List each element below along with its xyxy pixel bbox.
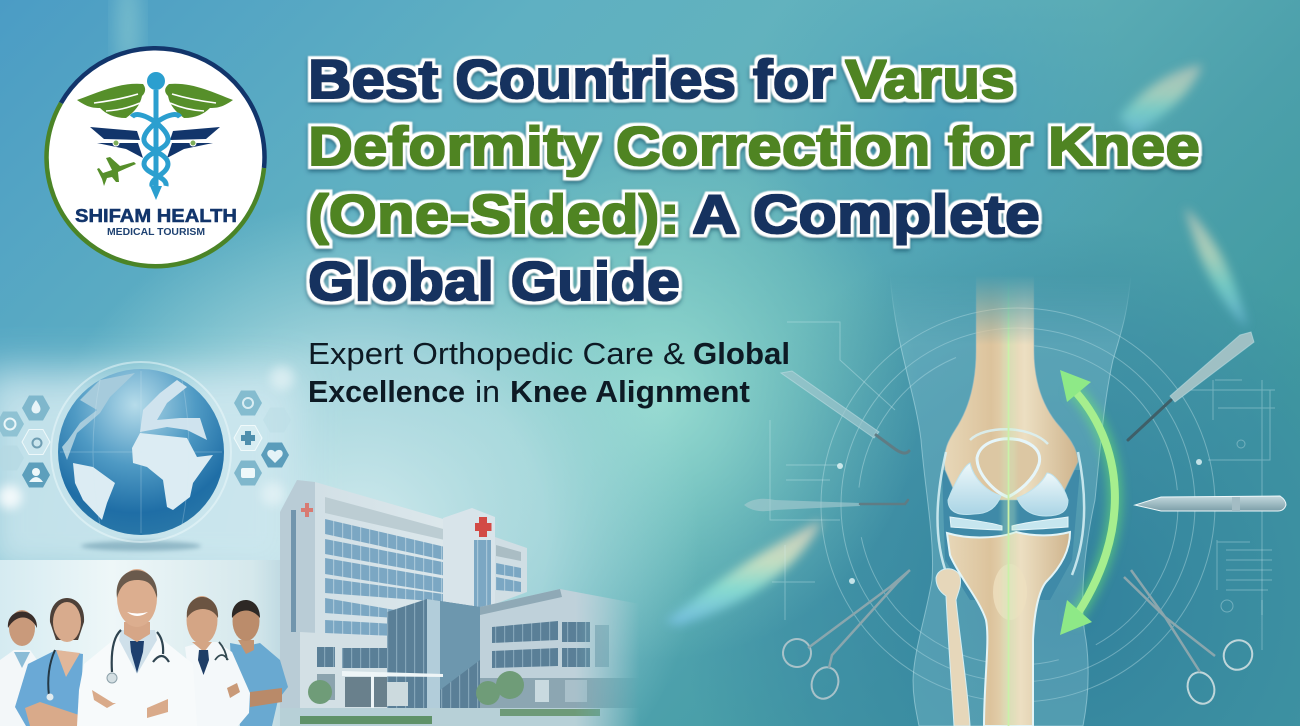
icon: green wings bbox=[77, 84, 233, 118]
capsule outline bbox=[938, 429, 1084, 575]
hospital building bbox=[280, 480, 650, 726]
continents bbox=[62, 373, 213, 520]
entrance canopy bbox=[342, 671, 443, 677]
title: A Complete bbox=[692, 183, 1040, 245]
title: Best Countries for bbox=[308, 48, 833, 110]
subtitle: Excellence bbox=[308, 374, 465, 409]
badge circle bbox=[46, 48, 265, 266]
title: (One-Sided): bbox=[308, 183, 680, 245]
light streaks bbox=[118, 0, 1247, 625]
knee anatomy bbox=[890, 275, 1131, 726]
roof glazing bbox=[325, 497, 443, 540]
instrument: dissector top right bbox=[1128, 332, 1254, 440]
podium bbox=[300, 632, 315, 708]
glow blobs bbox=[0, 366, 294, 509]
logo wordmark: SHIFAM HEALTH bbox=[75, 206, 237, 226]
subtitle: Expert Orthopedic Care & bbox=[308, 336, 685, 371]
logo badge bbox=[46, 48, 265, 266]
subtitle bbox=[308, 336, 790, 409]
dark joint backdrop bbox=[942, 470, 1080, 600]
logo tagline: MEDICAL TOURISM bbox=[107, 227, 205, 238]
title bbox=[308, 48, 1200, 312]
femur bbox=[944, 275, 1078, 500]
right wing bbox=[495, 537, 527, 604]
soft tissue silhouette bbox=[890, 275, 1131, 726]
doctor right in white coat bbox=[185, 596, 250, 726]
hedge and forecourt bbox=[280, 708, 650, 726]
tower bbox=[443, 508, 495, 610]
globe cluster bbox=[0, 362, 294, 551]
icon: navy lower wings bbox=[90, 127, 220, 158]
backdrop panel bbox=[0, 560, 280, 726]
meniscus bbox=[950, 517, 1068, 530]
hexagon icons right bbox=[234, 390, 291, 486]
correction arrow bbox=[1060, 370, 1115, 635]
tibia bbox=[947, 532, 1070, 726]
instrument: scalpel right bbox=[1135, 496, 1286, 511]
subtitle: Global bbox=[693, 336, 790, 371]
technical ring diagram behind knee bbox=[770, 308, 1275, 702]
main front facade bbox=[315, 482, 443, 637]
tibial tuberosity bbox=[993, 565, 1007, 619]
axis glow bbox=[1002, 275, 1016, 726]
surgical instruments bbox=[744, 332, 1286, 707]
lateral cartilage bbox=[1017, 473, 1068, 516]
icon: red cross bbox=[475, 517, 492, 537]
globe shadow bbox=[81, 541, 201, 551]
doctors group bbox=[0, 560, 288, 726]
instrument: probe left bbox=[744, 499, 908, 511]
doctor female in blue scrubs bbox=[15, 598, 84, 726]
window bands bbox=[325, 519, 443, 636]
patella bbox=[977, 439, 1040, 497]
left side face bbox=[280, 480, 315, 708]
fibula bbox=[936, 569, 970, 726]
instrument: forceps left bbox=[778, 570, 910, 702]
small red cross bbox=[301, 503, 313, 517]
subtitle: in bbox=[475, 374, 500, 409]
instrument: scissors right bbox=[1124, 570, 1258, 707]
title: Varus bbox=[845, 48, 1015, 110]
icon: caduceus staff and snakes bbox=[132, 72, 180, 200]
instrument: dissector top left bbox=[781, 371, 909, 453]
hexagon icons left bbox=[0, 396, 50, 488]
doctor far right in blue scrubs bbox=[230, 600, 288, 726]
glass atrium bbox=[387, 599, 480, 708]
mechanical axis line bbox=[1008, 275, 1010, 726]
icon: airplane bbox=[97, 157, 136, 186]
title: Global Guide bbox=[308, 250, 680, 312]
medial cartilage bbox=[948, 463, 1001, 514]
doctor far left bbox=[0, 610, 40, 726]
trees bbox=[308, 671, 524, 705]
entrance door bbox=[387, 682, 408, 706]
subtitle: Knee Alignment bbox=[510, 374, 750, 409]
lower right block bbox=[480, 589, 634, 678]
globe bbox=[51, 362, 231, 542]
title: Deformity Correction for Knee bbox=[308, 115, 1200, 177]
lead doctor in white coat bbox=[77, 569, 197, 726]
